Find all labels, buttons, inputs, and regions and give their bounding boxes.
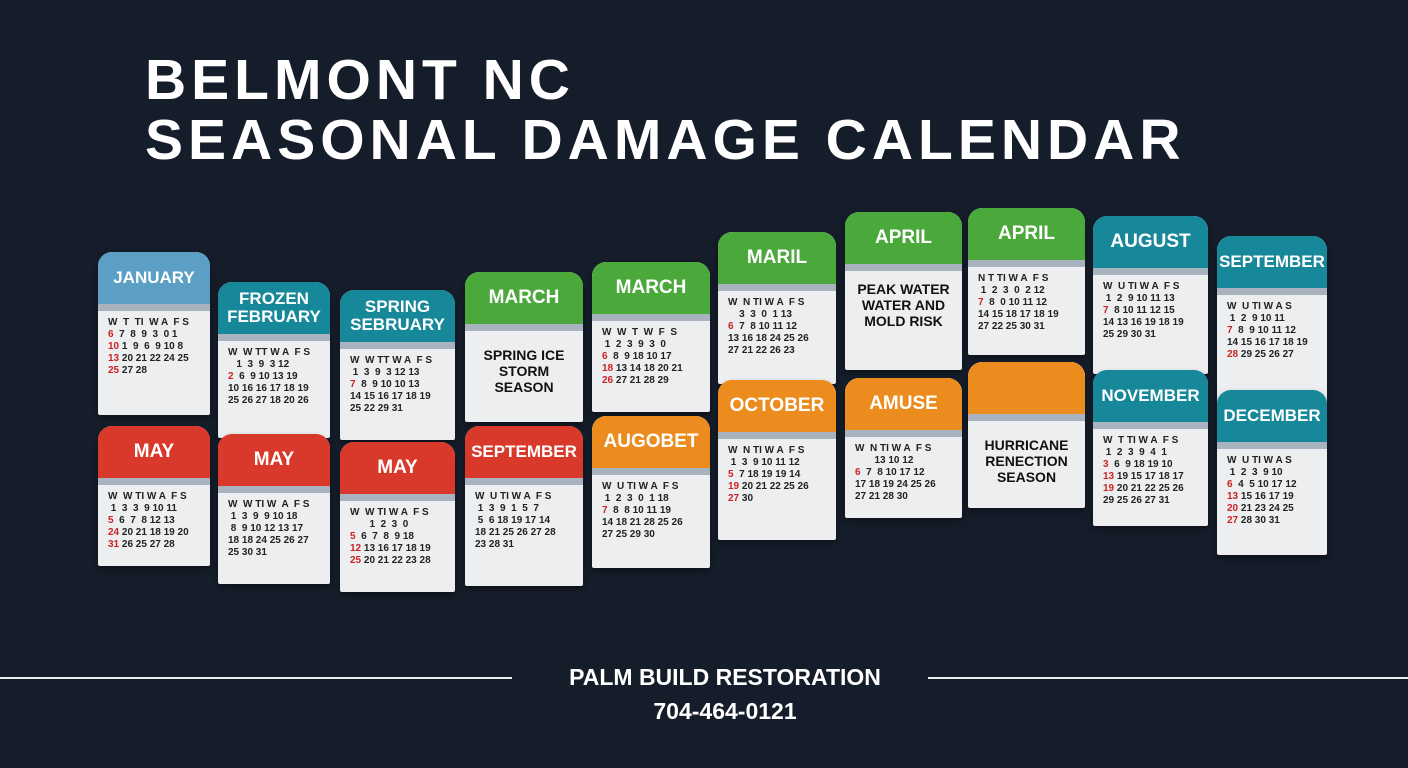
title: SEASONAL DAMAGE CALENDAR [145, 108, 1186, 172]
card: March storm [465, 272, 583, 422]
card: April peak [845, 212, 962, 370]
card: Augobet: AUGOBET [604, 431, 698, 452]
card: November: W T TI W A F S 1 2 3 9 4 1 3 6 9 18 19 10 13 19 15 17 18 17 19 20 21 22 25 26 29 25 26 27 31 [1103, 435, 1184, 506]
footer: company and phone [569, 664, 881, 724]
card: September [1217, 236, 1327, 404]
card: April peak: MOLD RISK [864, 313, 943, 329]
card: Frozen February: FEBRUARY [227, 307, 321, 326]
card: January: W T TI W A F S 6 7 8 9 3 0 1 10 1 9 6 9 10 8 13 20 21 22 24 25 25 27 28 [108, 317, 189, 376]
card: Hurricane: SEASON [997, 469, 1056, 485]
card: November: NOVEMBER [1101, 386, 1200, 405]
card: Hurricane: RENECTION [985, 453, 1068, 469]
card: March storm: SEASON [494, 379, 554, 395]
footer: company and phone: PALM BUILD RESTORATION [569, 664, 881, 690]
card: May 3: W W TI W A F S 1 2 3 0 5 6 7 8 9 18 12 13 16 17 18 19 25 20 21 22 23 28 [350, 507, 431, 566]
card: May 2: MAY [254, 449, 294, 470]
card: March [592, 262, 710, 412]
card: Augobet [592, 416, 710, 568]
card: Spring Sebruary: SPRING [365, 297, 430, 316]
card: Frozen February: W W TT W A F S 1 3 9 3 12 2 6 9 10 13 19 10 16 16 17 18 19 25 26 27 18 20 26 [228, 347, 310, 406]
card: April [968, 208, 1085, 355]
card: December: DECEMBER [1223, 406, 1321, 425]
card: April peak: PEAK WATER [857, 281, 950, 297]
card: December [1217, 390, 1327, 555]
card: March: W W T W F S 1 2 3 9 3 0 6 8 9 18 10 17 18 13 14 18 20 21 26 27 21 28 29 [602, 327, 683, 386]
card: May 2 [218, 434, 330, 584]
card: November [1093, 370, 1208, 526]
card: Maril: W N TI W A F S 3 3 0 1 13 6 7 8 10 11 12 13 16 18 24 25 26 27 21 22 26 23 [728, 297, 809, 356]
card: Amuse: AMUSE [869, 393, 938, 414]
card: Maril [718, 232, 836, 384]
card: May 2: W W TI W A F S 1 3 9 9 10 18 8 9 10 12 13 17 18 18 24 25 26 27 25 30 31 [228, 499, 309, 558]
card: December: W U TI W A S 1 2 3 9 10 6 4 5 10 17 12 13 15 16 17 19 20 21 23 24 25 27 28 30 31 [1227, 455, 1297, 526]
card: January: JANUARY [113, 268, 195, 287]
card: September: SEPTEMBER [1219, 252, 1325, 271]
card: Amuse [845, 378, 962, 518]
card: Maril: MARIL [747, 247, 807, 268]
card: March storm: MARCH [489, 287, 559, 308]
card: January [98, 252, 210, 415]
card: Amuse: W N TI W A F S 13 10 12 6 7 8 10 17 12 17 18 19 24 25 26 27 21 28 30 [855, 443, 936, 502]
title: BELMONT NC [145, 48, 575, 112]
card: May 1: MAY [134, 441, 174, 462]
card: April peak: APRIL [875, 227, 932, 248]
card: August: W U TI W A F S 1 2 9 10 11 13 7 8 10 11 12 15 14 13 16 19 18 19 25 29 30 31 [1103, 281, 1184, 340]
card: May 3 [340, 442, 455, 592]
card: March storm: STORM [499, 363, 549, 379]
card: March: MARCH [616, 277, 686, 298]
card: September 2: W U TI W A F S 1 3 9 1 5 7 5 6 18 19 17 14 18 21 25 26 27 28 23 28 31 [475, 491, 556, 550]
card: October [718, 380, 836, 540]
card: August: AUGUST [1110, 231, 1191, 252]
card: Spring Sebruary: SEBRUARY [350, 315, 445, 334]
card: March storm: SPRING ICE [484, 347, 564, 363]
card: September: W U TI W A S 1 2 9 10 11 7 8 9 10 11 12 14 15 16 17 18 19 28 29 25 26 27 [1227, 301, 1308, 360]
card: Spring Sebruary [340, 290, 455, 440]
card: Spring Sebruary: W W TT W A F S 1 3 9 3 12 13 7 8 9 10 10 13 14 15 16 17 18 19 25 22 29 31 [350, 355, 432, 414]
card: Frozen February [218, 282, 330, 438]
card: October: W N TI W A F S 1 3 9 10 11 12 5 7 18 19 19 14 19 20 21 22 25 26 27 30 [728, 445, 809, 504]
card: August [1093, 216, 1208, 374]
card: Augobet: W U TI W A F S 1 2 3 0 1 18 7 8 8 10 11 19 14 18 21 28 25 26 27 25 29 30 [602, 481, 683, 540]
card: September 2: SEPTEMBER [471, 442, 577, 461]
calendar grid [98, 208, 1328, 595]
card: May 1: W W TI W A F S 1 3 3 9 10 11 5 6 7 8 12 13 24 20 21 18 19 20 31 26 25 27 28 [108, 491, 189, 550]
card: Hurricane [968, 362, 1085, 508]
card: Frozen February: FROZEN [239, 289, 309, 308]
card: October: OCTOBER [730, 395, 824, 416]
card: April peak: WATER AND [862, 297, 945, 313]
card: September 2 [465, 426, 583, 586]
footer: company and phone: 704-464-0121 [653, 698, 797, 724]
card: May 1 [98, 426, 210, 566]
card: April: APRIL [998, 223, 1055, 244]
card: May 3: MAY [377, 457, 418, 478]
title [145, 48, 1186, 172]
card: April: N T TI W A F S 1 2 3 0 2 12 7 8 0 10 11 12 14 15 18 17 18 19 27 22 25 30 31 [978, 273, 1059, 332]
card: Hurricane: HURRICANE [984, 437, 1068, 453]
